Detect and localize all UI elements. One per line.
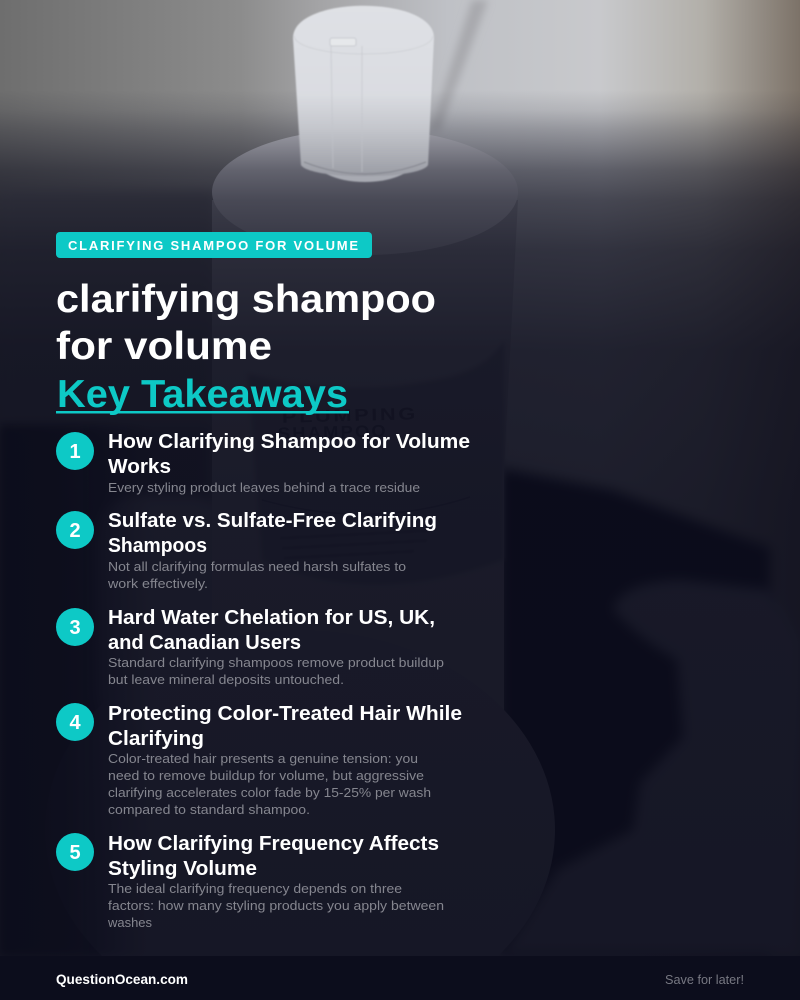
description 2: Not all clarifying formulas need harsh sulfates to bbox=[108, 559, 406, 574]
heading 4: Clarifying bbox=[108, 728, 204, 750]
number badge 3: 3 bbox=[69, 617, 81, 639]
heading 1: How Clarifying Shampoo for Volume bbox=[108, 431, 470, 453]
description 2 bbox=[107, 559, 406, 591]
description 4 bbox=[108, 751, 431, 817]
description 1: Every styling product leaves behind a trace residue bbox=[108, 480, 420, 495]
tag badge: CLARIFYING SHAMPOO FOR VOLUME bbox=[68, 238, 358, 253]
number badge 5: 5 bbox=[69, 842, 81, 864]
heading 4: Protecting Color-Treated Hair While bbox=[108, 703, 462, 725]
number badge 5 bbox=[56, 833, 94, 871]
number badge 4 bbox=[56, 703, 94, 741]
heading 2 bbox=[108, 510, 437, 557]
description 4: compared to standard shampoo. bbox=[108, 802, 310, 817]
pump bottle blob bbox=[500, 580, 800, 956]
heading 3 bbox=[108, 607, 435, 654]
description 3 bbox=[108, 655, 444, 687]
title: clarifying shampoo bbox=[56, 278, 436, 321]
tag badge bbox=[56, 232, 372, 258]
bottle label text: SHAMPOO bbox=[278, 421, 388, 443]
description 3: but leave mineral deposits untouched. bbox=[108, 672, 344, 687]
description 4: clarifying accelerates color fade by 15-25% per wash bbox=[108, 785, 431, 800]
takeaway 4 bbox=[56, 703, 462, 817]
takeaway 5 bbox=[56, 833, 444, 930]
bottle label text: PLUMPING bbox=[282, 404, 418, 427]
heading 3: Hard Water Chelation for US, UK, bbox=[108, 607, 435, 629]
takeaway 1 bbox=[56, 431, 470, 495]
heading 2: Sulfate vs. Sulfate-Free Clarifying bbox=[108, 510, 437, 532]
takeaway 2 bbox=[56, 510, 437, 591]
heading 1: Works bbox=[108, 456, 171, 478]
number badge 4: 4 bbox=[69, 712, 81, 734]
description 3: Standard clarifying shampoos remove product buildup bbox=[108, 655, 444, 670]
description 5: washes bbox=[107, 915, 152, 930]
number badge 3 bbox=[56, 608, 94, 646]
heading 5: How Clarifying Frequency Affects bbox=[108, 833, 439, 855]
number badge 2: 2 bbox=[69, 520, 81, 542]
number badge 2 bbox=[56, 511, 94, 549]
heading 5: Styling Volume bbox=[108, 858, 257, 880]
footer bar bbox=[0, 956, 800, 1000]
takeaway 3 bbox=[56, 607, 444, 687]
subtitle: Key Takeaways: Key Takeaways bbox=[57, 373, 348, 416]
footer save note: Save for later! bbox=[665, 972, 744, 987]
description 5: factors: how many styling products you apply between bbox=[108, 898, 444, 913]
description 5: The ideal clarifying frequency depends on three bbox=[108, 881, 402, 896]
bottle label text bbox=[278, 404, 418, 443]
description 4: need to remove buildup for volume, but aggressive bbox=[108, 768, 424, 783]
title bbox=[56, 278, 436, 368]
number badge 1 bbox=[56, 432, 94, 470]
description 5 bbox=[107, 881, 444, 930]
heading 5 bbox=[108, 833, 439, 880]
heading 2: Shampoos bbox=[108, 535, 207, 557]
number badge 1: 1 bbox=[69, 441, 81, 463]
heading 4 bbox=[108, 703, 462, 750]
title: for volume bbox=[56, 325, 272, 368]
bottle cap bbox=[293, 6, 434, 182]
description 4: Color-treated hair presents a genuine tension: you bbox=[108, 751, 418, 766]
footer brand: QuestionOcean.com bbox=[56, 971, 188, 987]
heading 3: and Canadian Users bbox=[108, 632, 301, 654]
description 2: work effectively. bbox=[107, 576, 208, 591]
heading 1 bbox=[108, 431, 470, 478]
